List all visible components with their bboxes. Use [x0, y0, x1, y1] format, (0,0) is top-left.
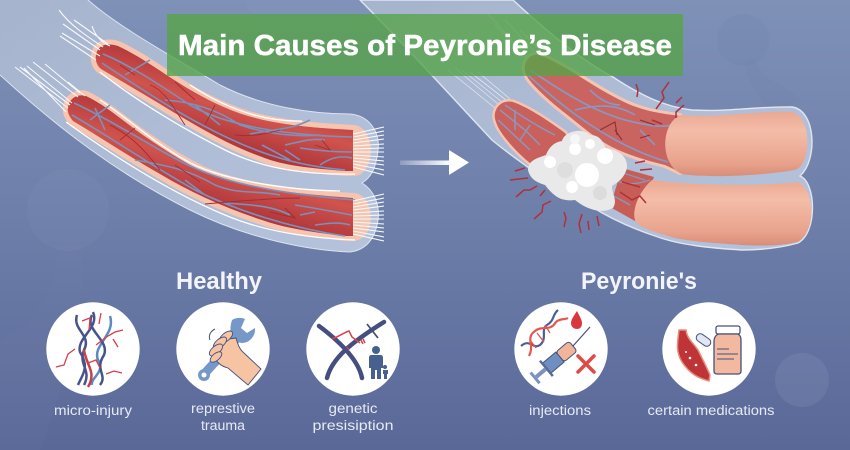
red crack lines: [510, 82, 684, 233]
lower tube damaged section: [495, 101, 654, 221]
icon: tangled fibres: [56, 312, 123, 387]
white fibres, peyronie's: [448, 14, 540, 108]
label: genetic presisiption: genetic: [328, 401, 378, 416]
icon: chromosome and figures: [319, 322, 388, 379]
sheath silhouette, peyronie's: [360, 0, 812, 250]
cause: injections: [514, 302, 608, 418]
cause: certain medications: [648, 302, 775, 418]
icon: hand gripping wrench: [198, 318, 261, 385]
title text: Main Causes of Peyronie’s Disease: [178, 30, 672, 62]
peyronie's anatomy illustration: [360, 0, 812, 250]
healthy-looking pink shaft, lower: [634, 180, 812, 246]
upper healthy tube: [96, 45, 366, 174]
heading: Peyronie's: Peyronie's: [581, 268, 697, 295]
transition arrow: [400, 150, 469, 175]
upper tube damaged section: [525, 55, 680, 172]
icon: artery, pill and bottle: [677, 326, 741, 381]
white fibres, healthy: [15, 10, 384, 241]
label: genetic presisiption: [312, 401, 394, 433]
healthy-looking pink shaft, upper: [665, 112, 807, 176]
lower healthy tube: [66, 95, 366, 240]
cause: genetic predisposition: [306, 302, 400, 433]
plaque: [528, 131, 627, 211]
healthy anatomy illustration: [0, 0, 384, 252]
sheath silhouette, healthy: [0, 0, 378, 252]
label: micro-injury: micro-injury: [54, 403, 132, 418]
cause: micro-injury: [46, 302, 140, 418]
title band: [167, 14, 683, 76]
icon: DNA, syringe, drop and cross: [521, 310, 594, 387]
label: represtive trauma: [191, 401, 255, 433]
label: represtive trauma: trauma: [201, 418, 245, 433]
label: injections: injections: [529, 403, 591, 418]
label: certain medications: certain medications: [648, 403, 775, 418]
label: genetic presisiption: presisiption: [312, 418, 394, 433]
cause: repetitive trauma: [176, 302, 270, 433]
label: represtive trauma: represtive: [191, 401, 255, 416]
heading: Healthy: Healthy: [176, 268, 263, 295]
